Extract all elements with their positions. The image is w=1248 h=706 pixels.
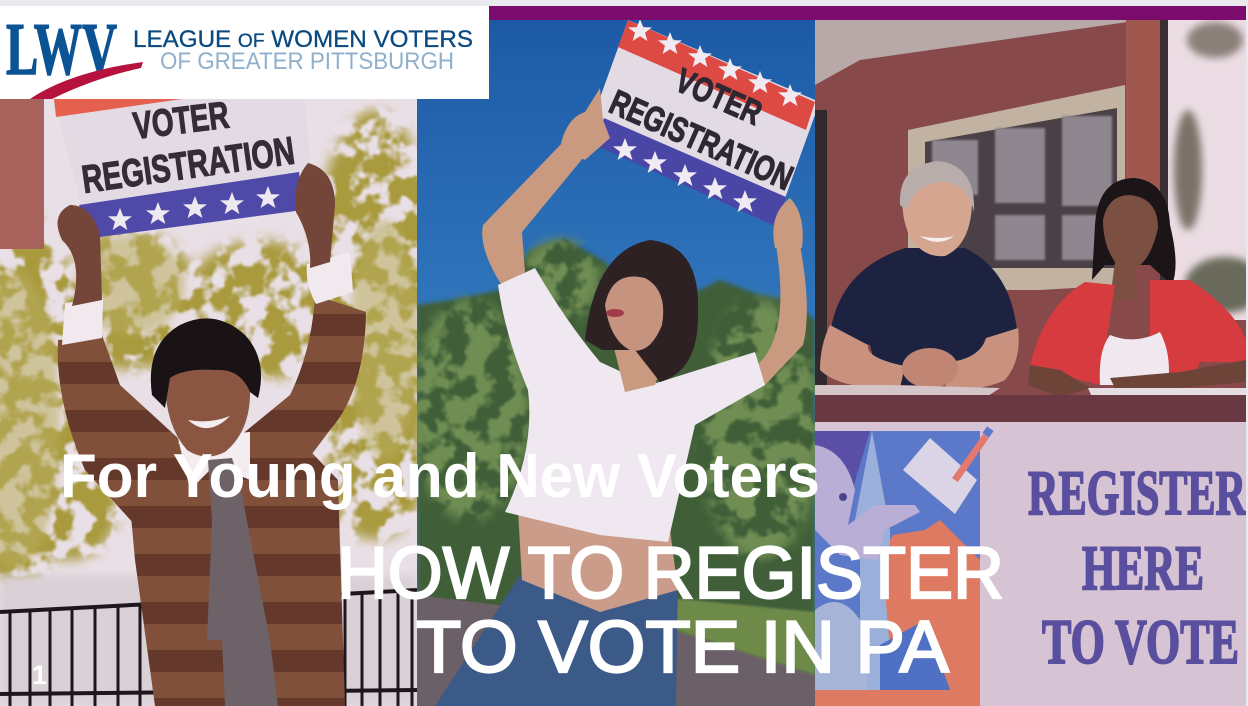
table top	[815, 395, 1246, 422]
right arm	[758, 248, 807, 385]
logo: League of Women Voters	[0, 6, 489, 99]
panel: registration table	[815, 20, 1248, 706]
woman: face and neck	[1103, 195, 1158, 300]
man: hair	[900, 161, 974, 212]
man: torso in striped sweater	[125, 430, 345, 706]
slide number: 1	[32, 660, 47, 690]
capitol spire	[855, 431, 890, 690]
title line 2: TO VOTE IN PA	[416, 607, 949, 688]
jeans	[435, 575, 678, 706]
brick pillar	[1126, 20, 1160, 240]
upper branches	[1187, 22, 1243, 58]
window glass	[932, 116, 1112, 260]
lips	[606, 309, 624, 317]
hair	[585, 240, 698, 382]
woman: hair	[1092, 178, 1176, 285]
right sleeve	[244, 300, 366, 454]
brick building	[0, 99, 44, 249]
neck and chest	[614, 350, 658, 392]
red base	[815, 690, 980, 706]
capitol dome	[815, 602, 868, 690]
panel: young woman with sign	[410, 19, 820, 706]
left sleeve	[58, 335, 180, 525]
right forearm and hand	[295, 163, 335, 268]
right sky and tree	[1160, 20, 1246, 320]
face	[166, 370, 250, 456]
man: arms	[820, 325, 905, 388]
right hand on sign	[773, 198, 803, 248]
white shirt	[498, 268, 765, 542]
blue sky	[417, 20, 815, 706]
sign	[54, 95, 311, 238]
LWV letters: LWV	[6, 9, 117, 91]
top light strip	[0, 0, 1248, 6]
left porch post	[815, 110, 827, 390]
blue lower area	[880, 620, 950, 690]
man: face	[902, 170, 972, 256]
foliage base tone	[0, 220, 420, 570]
poster art	[815, 426, 994, 706]
ballot paper	[903, 438, 977, 514]
elephant eye	[839, 493, 847, 501]
man: clasped hands	[902, 348, 958, 388]
dark window frame	[1160, 20, 1168, 290]
title	[337, 533, 1004, 688]
banner text	[1028, 457, 1247, 677]
sign text: VOTER	[670, 62, 767, 133]
man: smile	[920, 236, 954, 242]
tree highlights	[410, 240, 820, 560]
panel: young man with sign	[0, 95, 440, 706]
left hand on sign	[560, 88, 610, 160]
hair	[151, 318, 261, 408]
pavement	[0, 575, 417, 706]
woman: arms and hands	[1028, 365, 1090, 397]
papers on table	[815, 385, 1000, 398]
face	[605, 277, 663, 351]
branches	[1174, 110, 1202, 230]
background sky	[0, 99, 417, 574]
pale window surround	[908, 85, 1125, 290]
brick wall	[815, 20, 1246, 420]
grass	[677, 598, 815, 676]
man: navy polo	[830, 248, 1017, 385]
shirt collar	[178, 432, 250, 490]
red band	[54, 99, 182, 117]
woman: white top	[1100, 332, 1169, 385]
left arm	[482, 144, 582, 284]
subtitle: For Young and New Voters	[60, 442, 820, 511]
league name: LEAGUE OF WOMEN VOTERS	[133, 26, 473, 53]
distant tree	[1185, 257, 1248, 313]
blue band	[79, 172, 303, 238]
necktie	[207, 458, 278, 706]
sign	[592, 19, 815, 226]
purple header bar	[489, 6, 1246, 21]
iron fence	[0, 590, 417, 706]
sign: REGISTRATION	[79, 130, 297, 202]
pencil	[955, 436, 986, 480]
pencil eraser	[982, 426, 994, 438]
blue band	[595, 118, 786, 226]
green trees	[417, 238, 815, 706]
smile	[188, 416, 230, 428]
dark window	[925, 108, 1117, 268]
donkey	[885, 520, 980, 690]
road	[417, 595, 815, 706]
purple corner	[815, 431, 870, 505]
sign stars	[108, 186, 280, 230]
chapter name: OF GREATER PITTSBURGH	[160, 48, 454, 75]
red band	[618, 20, 815, 130]
woman: red cardigan	[1030, 280, 1246, 385]
red swoosh	[30, 62, 143, 99]
logo background	[0, 6, 489, 99]
foliage	[0, 110, 440, 590]
elephant	[815, 445, 920, 560]
shirt cuffs	[62, 298, 103, 345]
left forearm and hand	[58, 205, 102, 306]
table banner	[815, 422, 1246, 706]
poster background	[815, 431, 980, 691]
porch roof	[815, 20, 1128, 85]
sign: REGISTRATION	[604, 83, 799, 198]
midriff	[518, 510, 678, 612]
sign stars	[613, 19, 802, 212]
title line 1: HOW TO REGISTER	[337, 533, 1004, 614]
sign text: VOTER	[131, 95, 231, 148]
